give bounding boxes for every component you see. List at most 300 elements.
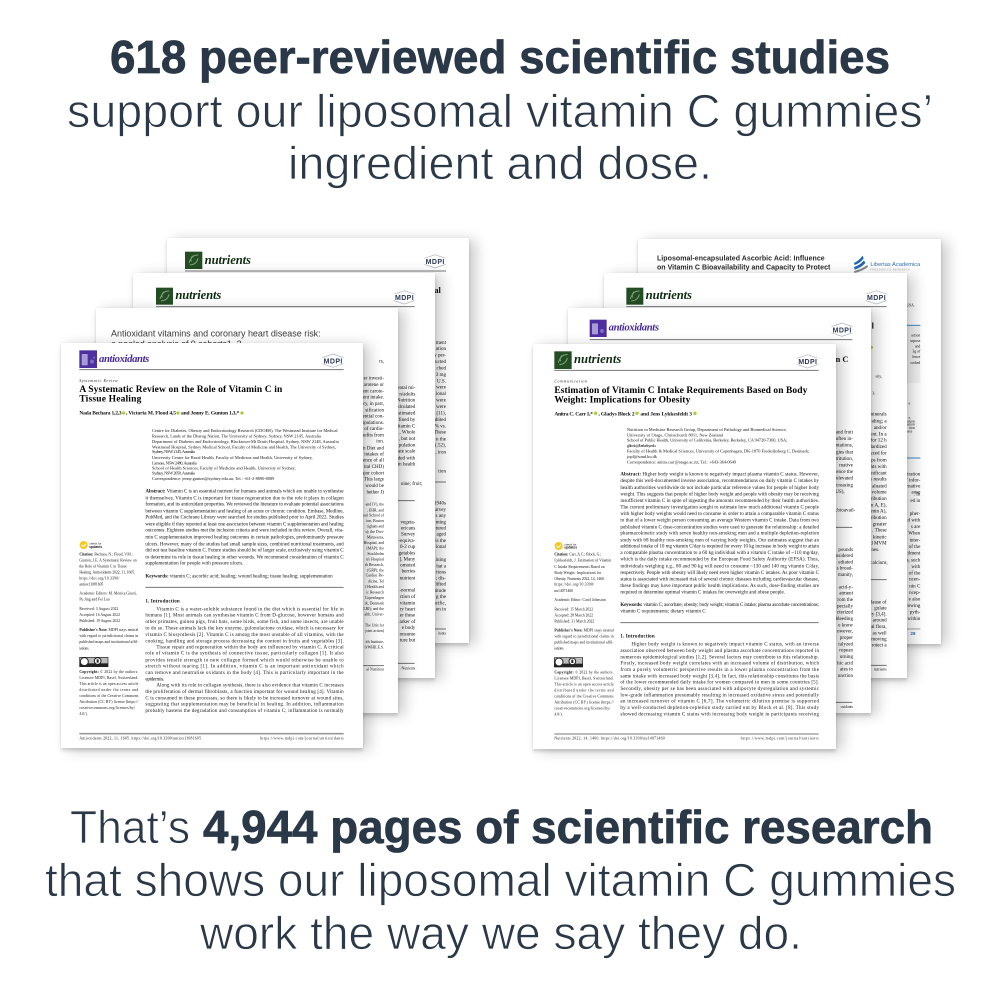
logo: Libertas Academica [854,256,921,273]
text fragment: ith Institute, [365,640,384,645]
text fragment: sity, [875,374,882,380]
introduction text: other primates, guinea pigs, fruit bats, some birds, some fish, and some insects, are unable [145,618,344,625]
affiliations: University of Otago, Christchurch 8011, New Zealand [627,433,724,439]
text fragment: en Diet and [361,446,384,452]
text fragment: n's Hospital [366,558,384,562]
sidebar: citation and notes: conditions of the Creative Commons [79,694,139,698]
sidebar: citation and notes: published maps and institutional affil- [79,640,139,644]
text fragment: dculated [399,404,416,410]
text fragment: n the [436,437,447,443]
text fragment: ubited [433,417,446,423]
paper title: Weight: Implications for Obesity [555,396,691,406]
introduction text: Firstly, increased body weight correlates with an increased volume of distribution, which [621,660,820,667]
article type: Systematic Review [79,379,118,383]
article type: Communication [555,380,587,384]
MDPI badge [831,323,854,337]
text fragment: e also [909,597,921,603]
text fragment: ent. In a [870,432,887,438]
text fragment: tured [436,526,446,532]
sidebar: citation and notes: distributed under the terms and [555,689,614,693]
text fragment: ional [436,544,447,550]
text fragment [867,374,888,672]
text fragment: tion [438,469,446,475]
text fragment: rotect a [872,643,887,649]
heading: top statement [67,31,933,189]
text fragment: ental mi- [398,385,416,391]
text fragment: ining [436,557,446,563]
introduction text: showed decreasing vitamin C status with increasing body weight in participants receiving [621,712,820,718]
text fragment: (.52), [435,442,446,449]
text fragment [396,385,423,671]
text fragment: Hospital, and [364,541,384,546]
heading: bottom statement: work the way we say they do. [199,907,802,959]
abstract: ulcers. However, many of the studies had small sample sizes, combined nutritional treatments, and [145,541,344,548]
text fragment: owever, [837,629,853,635]
paper title: Antioxidant vitamins and coronary heart disease risk: [111,329,321,339]
text fragment: gies that [836,450,854,456]
text fragment: th Research, [365,563,384,568]
introduction text: Higher body weight is known to negatively impact vitamin C status, with an inverse [632,642,820,648]
text fragment: berries [402,569,416,575]
sidebar: citation and notes: Publisher's Note: MDPI stays neutral [79,628,138,632]
affiliations: jopl@sund.ku.dk [626,454,658,459]
affiliations: School of Health Sciences, Faculty of Medicine and Health, University of Sydney, [152,466,296,472]
text fragment: getables [399,551,416,557]
introduction text: Along with its role in collagen synthesis, there is also evidence that vitamin C increases [156,683,344,689]
text fragment: 0/WHILE.S. [365,646,384,650]
text fragment: These [434,430,447,436]
text fragment: stimated [399,411,416,417]
abstract box: 3g of [913,350,921,354]
text fragment: rs, [379,359,384,365]
text fragment: ence of all [363,457,385,464]
text fragment: urning [840,654,854,660]
text fragment: (11), [437,410,446,417]
text fragment: 0-2 cup [400,544,416,550]
sidebar: citation and notes: https://doi.org/10.3390/ [79,577,120,581]
sidebar: citation and notes: Attribution (CC BY) license (https:// [555,701,615,705]
text fragment: ncep- [909,590,921,596]
text fragment: tribution [869,496,887,502]
text fragment: . These [872,528,887,534]
sidebar: citation and notes: Obesity. Nutrients 2022, 14, 1460. [555,577,605,582]
affiliations: Westmead Hospital, Sydney Medical School, Faculty of Medicine and Health, The University of Sydney, [152,445,336,451]
paper title [79,385,283,405]
text fragment: ion. [376,439,384,445]
footer: https://www.mdpi.com/journal/antioxidants [260,737,344,741]
journal name: antioxidants [99,354,149,365]
text fragment: lified [435,581,446,588]
sidebar: citation and notes: 4.0/). [555,713,563,717]
sidebar: citation and notes: iations. [79,647,89,651]
text fragment: ent carote- [363,389,384,395]
authors: , Victoria M. Flood 4,5 [126,411,176,417]
text fragment: e know [839,623,854,629]
abstract: formation, and its antioxidant properties. We reviewed the literature to evaluate potential associations [145,501,344,508]
text fragment: in A, E), [870,502,887,509]
text fragment: cterized [837,610,854,616]
text fragment: pecially [837,604,854,610]
abstract: weight. This suggests that people of higher body weight and people with obesity may be receiving [621,491,820,498]
affiliations [626,427,810,465]
introduction text: 1. Introduction [145,599,180,605]
abstract: pharmacokinetic study with seven healthy non-smoking men and a multiple depletion-repletion [621,531,820,537]
text fragment: The Unit for [365,624,385,628]
text fragment: titude [434,588,447,594]
text fragment: talyzed [839,642,854,648]
text fragment: y per- [434,353,446,359]
affiliations: School of Public Health, University of California, Berkeley, Berkeley, CA 94720-7360, USA; [627,438,788,444]
text fragment: ignificant [867,470,887,477]
text fragment: calcium; [870,560,888,566]
affiliations: Sydney, NSW 2050, Australia [152,471,195,477]
text fragment [361,359,385,672]
text fragment: g the [436,594,447,600]
footer: Antioxidants 2022, 11, 1605. https://doi.org/10.3390/antiox11081605 [79,737,201,742]
introduction text: association observed between body weight and plasma ascorbate concentrations reported in [621,648,820,654]
text fragment: dardized [869,444,887,450]
sidebar: citation and notes: Gunton, J.E. A Systematic Review on [79,559,137,564]
affiliations: Lismore, NSW 2480, Australia [152,461,197,467]
heading: bottom statement: that shows our liposomal vitamin C gummies [45,854,956,906]
abstract: Abstract: Vitamin C is an essential nutrient for humans and animals which are unable to synthesise [145,488,344,495]
sidebar: citation and notes: Licensee MDPI, Basel, Switzerland. [79,676,138,681]
panel: left paper stack, back page (nutrients) [167,238,469,643]
abstract: health authorities worldwide do not include particular reference values for people of higher body [621,484,820,491]
MDPI badge: MDPI [395,295,414,302]
panel: left paper stack, back page (nutrients): al [434,286,441,295]
abstract box: and [915,345,921,349]
panel: left paper stack, second page (nutrients) [133,273,435,678]
logo: nutrients [156,288,173,305]
affiliations: Correspondence: anitra.carr@otago.ac.nz; Tel.: +643-364-0649 [627,460,737,465]
affiliations: Sydney, NSW 2145, Australia [152,449,195,455]
text fragment: for 12 h [871,437,887,444]
panel: right paper stack, third page (antioxidants): n C [836,355,849,364]
text fragment: atment [840,591,854,597]
MDPI badge [393,291,416,304]
journal name: antioxidants [609,323,659,334]
text fragment: onsume [400,632,416,638]
authors: , Gladys Block 2 [599,412,635,418]
MDPI badge [797,355,819,368]
sidebar: citation and notes [79,553,139,716]
abstract: status is associated with increased risk of several chronic diseases including cardiovascular disease, [621,576,819,583]
introduction text: by a well-conducted depletion-repletion study carried out by Block et al. [8]. This study [621,705,820,711]
text fragment: s any [435,513,446,519]
panel: right paper stack, second page (nutrients): l [872,322,875,331]
heading: top statement: ingredient and dose. [288,137,712,189]
authors: and Jens Lykkesfeldt 3 [641,412,693,418]
sidebar: citation and notes: Citation: Bechara, N.; Flood, V.M.; [79,553,133,558]
abstract: individuals weighing e.g., 80 and 90 kg will need to consume ~130 and 140 mg vitamin C/day, [621,564,819,570]
abstract: The current preliminary investigation sought to estimate how much additional vitamin C people [621,505,820,511]
text fragment: -equiva- [399,538,416,544]
affiliations: University Centre for Rural Health, Faculty of Medicine and Health, University of Sydney, [152,455,313,461]
text fragment: nutrients [874,668,887,672]
introduction text [145,599,344,714]
footer [555,734,820,742]
introduction text: Vitamin C is a water-soluble substance found in the diet which is essential for life in [156,606,344,613]
text fragment: aluated [872,484,887,490]
text fragment: Stockholm [367,552,384,556]
sidebar: citation and notes: Accepted: 16 August 2022 [79,613,120,617]
introduction text: epidermis. [145,677,164,683]
text fragment: lowing [907,603,921,609]
text fragment: s are [911,524,921,530]
MDPI badge: MDPI [799,359,817,366]
text fragment: nd MVM [868,541,887,547]
text fragment: proper [840,635,854,641]
text fragment: righam and [367,525,384,529]
abstract box: urpose [911,339,921,343]
text fragment: pher- [910,511,921,517]
icon: check for updates: updates [89,545,102,549]
panel: left front paper (antioxidants, vitamin C in tissue healing) [61,343,363,748]
sidebar: citation and notes: Healing. Antioxidants 2022, 11, 1605. [79,571,135,576]
text fragment: arotene or [364,382,384,388]
heading: bottom statement: That’s [70,801,190,853]
footer: https://www.mdpi.com/journal/nutrients [741,737,820,741]
authors: Anitra C. Carr 1,* [555,412,594,418]
abstract: Abstract: Higher body weight is known to negatively impact plasma vitamin C status. However, [621,472,819,478]
abstract: a comparable plasma concentration to a 60 kg individual with a vitamin C intake of ~110 mg/day, [621,549,819,556]
sidebar: citation and notes [555,553,615,717]
introduction text: can remove and neutralise oxidants in the body [4]. This is particularly important in the [145,670,344,676]
abstract: with higher body weights would need to consume in order to attain a comparable vitamin C status [621,511,819,517]
text fragment: ocific, [433,600,446,607]
text fragment [828,429,856,709]
abstract: vitamin C requirements; dietary vitamin C [621,609,707,615]
text fragment: sification [365,407,384,414]
text fragment: nes. [871,547,879,553]
text fragment: ction of [400,593,416,600]
logo: antioxidants [79,351,97,368]
sidebar: citation and notes: Accepted: 28 March 2022 [555,614,593,618]
abstract: did not test baseline vitamin C. Future studies should be of larger scale, exclusively using vitamin C [145,547,344,554]
abstract: supplementation for people with pressure ulcers. [145,560,243,567]
text fragment [432,340,447,636]
abstract box: lence [913,355,921,359]
text fragment: tritution, [836,456,853,462]
panel: left paper stack, third page (AJCN) [96,308,398,713]
text fragment: unction [838,673,854,679]
text fragment: omoted [401,563,416,569]
paper title: Tissue Healing [79,395,142,405]
text fragment: Survey [401,532,416,538]
heading: bottom statement: 4,944 pages of scientific research [203,801,933,853]
abstract: were eligible if they reported at least one association between vitamin C supplementation and healing [145,521,344,528]
text fragment: lause of [871,599,887,606]
text fragment: oxidants [841,705,854,709]
text fragment: ry, in part, [363,401,384,407]
paper title: on Vitamin C Bioavailability and Capacity to Protect [657,265,831,272]
journal name: nutrients [176,288,222,302]
text fragment: 2% vs. [432,424,446,430]
text fragment: nding; a [870,419,887,425]
introduction text: Secondly, obesity per se has been associated with adipocyte dysregulation and systemic [621,686,820,692]
text fragment: urvey [434,507,446,513]
text fragment: joint action) [364,629,385,633]
text fragment: gulate [874,606,887,612]
text fragment: lyzed for [869,450,887,457]
text fragment: /Nutrients [401,667,416,671]
introduction text: from a purely volumetric perspective results in a lower plasma concentration from the [621,666,820,673]
text fragment: as well [873,631,887,637]
text fragment: dded with [396,456,416,462]
text fragment: , iron [435,450,446,456]
affiliations: Centre for Diabetes, Obesity and Endocrinology Research (CDOER), The Westmead Institute for Medical [152,428,338,434]
MDPI badge [424,255,446,268]
text fragment: ming [436,520,446,526]
sidebar: citation and notes: C Intake Requirements Based on [555,565,605,569]
text fragment: moving [871,637,887,643]
text fragment: Cardiac Re- [366,574,385,578]
paper title: Estimation of Vitamin C Intake Requirements Based on Body [555,386,808,396]
paper title: A Systematic Review on the Role of Vitamin C in [79,385,283,395]
sidebar: citation and notes: Received: 3 August 2022 [79,607,118,611]
text fragment: ts, such [905,558,921,564]
authors [555,412,697,418]
text fragment: is the [435,538,447,544]
text fragment: in health [398,462,416,468]
affiliations: Faculty of Health & Medical Sciences, University of Copenhagen, DK-1870 Frederiksberg C, Denmark; [627,449,810,455]
text fragment: (GRP); the [367,569,384,573]
text fragment: alth, Univer- [365,613,385,618]
sidebar: citation and notes: distributed under the terms and [79,688,138,692]
footer [79,734,344,742]
text fragment: 1940s [434,501,446,507]
text fragment: dicine, Tel [368,580,384,585]
text fragment: itants [438,632,447,636]
text fragment: ause [912,490,921,496]
affiliations: Department of Diabetes and Endocrinology, Blacktown-Mt Druitt Hospital, Sydney, NSW 2148, Australia [152,439,339,445]
sidebar: citation and notes: antiox11081605 [79,583,103,587]
introduction text: Tissue repair and regeneration within the body are influenced by vitamin C. A critical [156,644,344,651]
text fragment: n/adults [400,392,416,398]
logo: nutrients [555,352,572,369]
text fragment: ates to [840,667,854,673]
panel: right paper stack, back page (Libertas Academica): lation [906,420,915,424]
text fragment: kinetic [873,535,887,541]
introduction text: numerous epidemiological studies [1,2]. Several factors may contribute to this relationship. [621,654,819,661]
text fragment: hic acid [837,661,854,667]
paper title: a pooled analysis of 9 cohorts1–3 [111,339,242,349]
text fragment: elevated [837,476,854,482]
icon: creative commons badge [79,657,108,667]
abstract: Keywords: vitamin C; ascorbate; obesity; body weight; vitamin C intake; plasma ascorbate concentrations; [621,602,820,608]
text fragment: hether J) [366,489,384,496]
panel: right front paper (nutrients, vitamin C intake and obesity) [533,344,836,749]
text fragment: tions [436,570,446,576]
text fragment: tribution [869,515,887,521]
affiliations [152,428,339,481]
text fragment: ucted [435,359,446,365]
text fragment: min A), [871,508,887,515]
text fragment: Copenhagen [365,596,384,600]
text fragment: d with [908,518,921,524]
introduction text: an increased turnover of vitamin C [6,7]. The volumetric dilution premise is supported [621,698,820,705]
logo: Libertas Academica: FREEDOM TO RESEARCH [871,269,910,272]
text fragment: nin C [910,584,921,590]
text fragment: intakes of [364,451,384,458]
text fragment: ' infor- [907,477,921,484]
abstract: study with 68 healthy non-smoking men of varying body weights. Our estimates suggest that an [621,537,820,544]
abstract: which is the daily intake recommended by the European Food Safety Authority (EFSA). Thus, [621,556,819,563]
text fragment: nefits from [362,432,384,439]
text fragment: volume [872,490,887,496]
text fragment: ent intake. [363,395,384,401]
journal name: nutrients [646,288,692,302]
text fragment: s broad- [837,566,854,572]
text fragment: ediated [839,560,854,566]
sidebar: citation and notes: with regard to jurisdictional claims in [79,634,138,638]
icon: check for updates [80,541,102,549]
abstract: to determine its role in tissue healing in other wounds. We recommend consideration of vitamin C [145,554,344,561]
abstract: to that of a lower weight person consuming an average Western vitamin C intake. Data from two [621,517,820,524]
affiliations: Research, Lands of the Dharug Nation, The University of Sydney, Sydney, NSW 2145, Australia [152,434,321,440]
text fragment: of the [909,543,921,550]
icon: check for updates [555,542,578,550]
text fragment: rnative [839,463,854,469]
introduction text: stretch without tearing [1]. In addition, vitamin C is an important antioxidant which [145,664,344,670]
text fragment: greater [873,522,887,528]
panel: right paper stack, second page (nutrients) [604,273,907,678]
sidebar: citation and notes: Published: 31 March 2022 [555,620,595,624]
text fragment: 3. [872,391,875,396]
text fragment [905,472,921,622]
sidebar: citation and notes: with regard to jurisdictional claims in [555,635,614,639]
paper title [111,329,321,349]
introduction text: the proliferation of dermal fibroblasts, a function important for wound healing [4]. Vitamin [145,688,344,695]
text fragment: , but not [399,436,416,442]
text fragment: and IV), the [366,503,384,508]
sidebar: citation and notes: Academic Editor: Carol Johnston [555,598,606,602]
icon: check for updates: updates [565,546,578,550]
text fragment: ajor cohort [362,471,385,477]
text fragment: ture but [400,638,416,644]
text fragment: on in [436,607,446,613]
abstract box [907,326,921,383]
text fragment: ericans [401,526,416,532]
sidebar: citation and notes: Licensee MDPI, Basel, Switzerland. [555,677,614,682]
sidebar: citation and notes: Copyright: © 2022 by the authors. [555,670,614,675]
sidebar: citation and notes: creativecommons.org/licenses/by/ [555,707,612,711]
text fragment: al flora, [871,623,887,630]
text fragment: , EHR, and [367,509,384,514]
introduction text: 1. Introduction [621,634,655,640]
paper title [555,386,808,406]
MDPI badge: MDPI [324,359,342,366]
text fragment: rom the [838,597,854,603]
heading: bottom statement [45,801,956,959]
introduction text: role of vitamin C is the synthesis of connective tissue, particularly collagen [1]. It also [145,650,344,657]
heading: top statement: support our liposomal vitamin C gummies’ [67,85,933,137]
text fragment: al Nutrition [366,668,384,672]
panel: right paper stack, back page (Libertas Academica): tion [909,426,915,430]
sidebar: citation and notes: 4.0/). [79,712,88,716]
abstract: insufficient vitamin C in spite of ingesting the amounts recommended by their health authorities. [621,497,819,504]
abstract box: sorbed [911,361,921,365]
abstract box: action [911,334,921,338]
text fragment: e results [870,477,887,483]
text fragment: er these [400,613,416,619]
introduction text [621,634,820,718]
panel: right paper stack, back page (Libertas Academica): e [909,401,911,406]
sidebar: citation and notes: iations. [555,647,565,651]
sidebar: citation and notes: Citation: Carr, A.C.; Block, G.; [555,553,602,558]
abstract: between vitamin C supplementation and healing of an acute or chronic condition. Embase, Medline, [145,508,344,515]
